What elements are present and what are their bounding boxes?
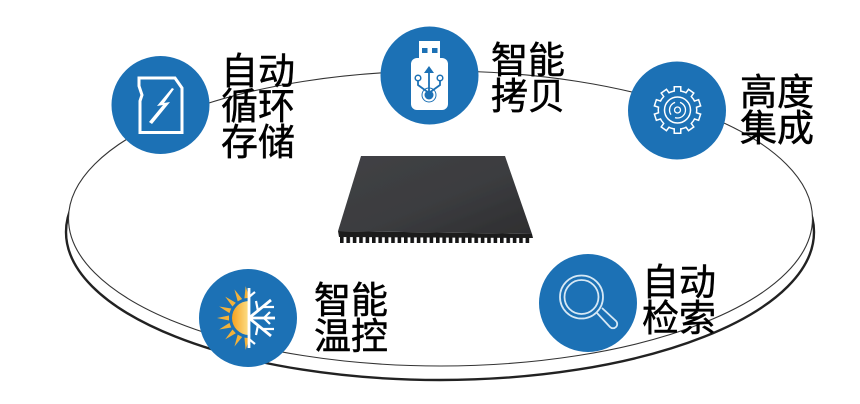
label: 高度 bbox=[740, 72, 814, 113]
label: 智能 bbox=[314, 280, 388, 321]
item: high integration: 集成 bbox=[740, 108, 814, 149]
item: smart temperature control: 温控 bbox=[314, 316, 388, 357]
label: 智能 bbox=[491, 40, 565, 81]
label: 自动 bbox=[221, 51, 295, 92]
icon: memory card bbox=[112, 56, 210, 154]
item: automatic loop storage: 循环 bbox=[221, 86, 295, 127]
item: automatic loop storage: 存储 bbox=[221, 122, 295, 163]
label: 自动 bbox=[642, 262, 716, 303]
chip bbox=[338, 156, 533, 243]
item: smart copy: 拷贝 bbox=[491, 76, 565, 117]
icon: magnifier bbox=[539, 254, 637, 352]
icon: sun and snowflake bbox=[199, 269, 297, 367]
item: smart temperature control bbox=[199, 269, 388, 367]
item: automatic search bbox=[539, 254, 716, 352]
platform ring bbox=[66, 71, 814, 380]
icon: USB drive bbox=[380, 26, 478, 124]
item: high integration bbox=[628, 62, 814, 160]
item: automatic loop storage bbox=[112, 51, 295, 163]
icon: gear bbox=[628, 62, 726, 160]
item: automatic search: 检索 bbox=[642, 298, 716, 339]
item: smart copy bbox=[380, 26, 565, 124]
